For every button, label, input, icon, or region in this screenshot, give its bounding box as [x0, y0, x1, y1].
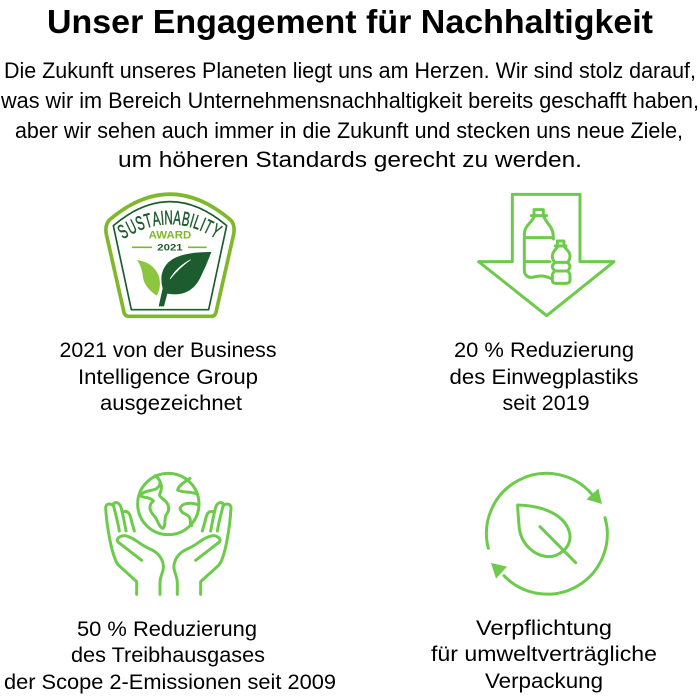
icon: sustainability award badge: T [142, 210, 155, 233]
label: greenhouse gas reduction: der Scope 2-Emissionen seit 2009 [4, 671, 336, 694]
arrowhead [586, 489, 602, 504]
icon: sustainability award badge: I [160, 207, 165, 230]
intro text block: aber wir sehen auch immer in die Zukunft und stecken uns neue Ziele, [15, 118, 683, 143]
arrowhead [491, 563, 507, 579]
intro text block: Die Zukunft unseres Planeten liegt uns am Herzen. Wir sind stolz darauf, [4, 58, 696, 83]
label: award: 2021 von der Business [60, 339, 276, 362]
icon: sustainability award badge: S [114, 221, 132, 244]
icon: sustainability award badge [106, 194, 234, 316]
label: plastic reduction: seit 2019 [502, 392, 590, 415]
icon: sustainability award badge: 2021 [157, 243, 183, 253]
label: packaging commitment [431, 617, 657, 693]
icon: sustainability award badge: Y [207, 220, 225, 243]
icon: hands holding earth [106, 473, 231, 594]
intro text block: um höheren Standards gerecht zu werden. [118, 147, 582, 172]
icon: sustainability award badge: U [123, 216, 140, 239]
label: award: Intelligence Group [78, 366, 258, 389]
title: Unser Engagement für Nachhaltigkeit [47, 3, 653, 40]
icon: sustainability award badge: A [151, 208, 162, 231]
icon: sustainability award badge: B [180, 208, 192, 231]
icon: sustainability award badge: AWARD [149, 229, 192, 241]
label: award [60, 339, 276, 415]
intro text block [0, 58, 699, 172]
label: packaging commitment: Verpflichtung [476, 617, 612, 640]
icon: sustainability award badge: N [164, 207, 173, 229]
icon: sustainability award badge: I [197, 214, 208, 236]
icon: sustainability award badge: L [191, 211, 204, 234]
label: greenhouse gas reduction: 50 % Reduzierung [77, 618, 257, 641]
label: greenhouse gas reduction: des Treibhausgases [71, 644, 265, 667]
label: packaging commitment: Verpackung [485, 670, 603, 693]
label: greenhouse gas reduction [4, 618, 336, 694]
label: award: ausgezeichnet [100, 392, 242, 415]
icon: sustainability award badge: S [133, 212, 148, 236]
intro text block: was wir im Bereich Unternehmensnachhaltigkeit bereits geschafft haben, [0, 88, 699, 113]
icon: down arrow with plastic bottles [479, 194, 614, 316]
icon: sustainability award badge: A [172, 207, 182, 230]
icon: sustainability award badge: T [200, 216, 216, 239]
label: plastic reduction: 20 % Reduzierung [454, 339, 634, 362]
icon: sustainability award badge: I [187, 210, 196, 232]
label: plastic reduction [450, 339, 638, 415]
icon: leaf with recycling arrows [486, 473, 607, 594]
label: packaging commitment: für umweltverträgliche [431, 643, 657, 666]
label: plastic reduction: des Einwegplastiks [450, 366, 638, 389]
